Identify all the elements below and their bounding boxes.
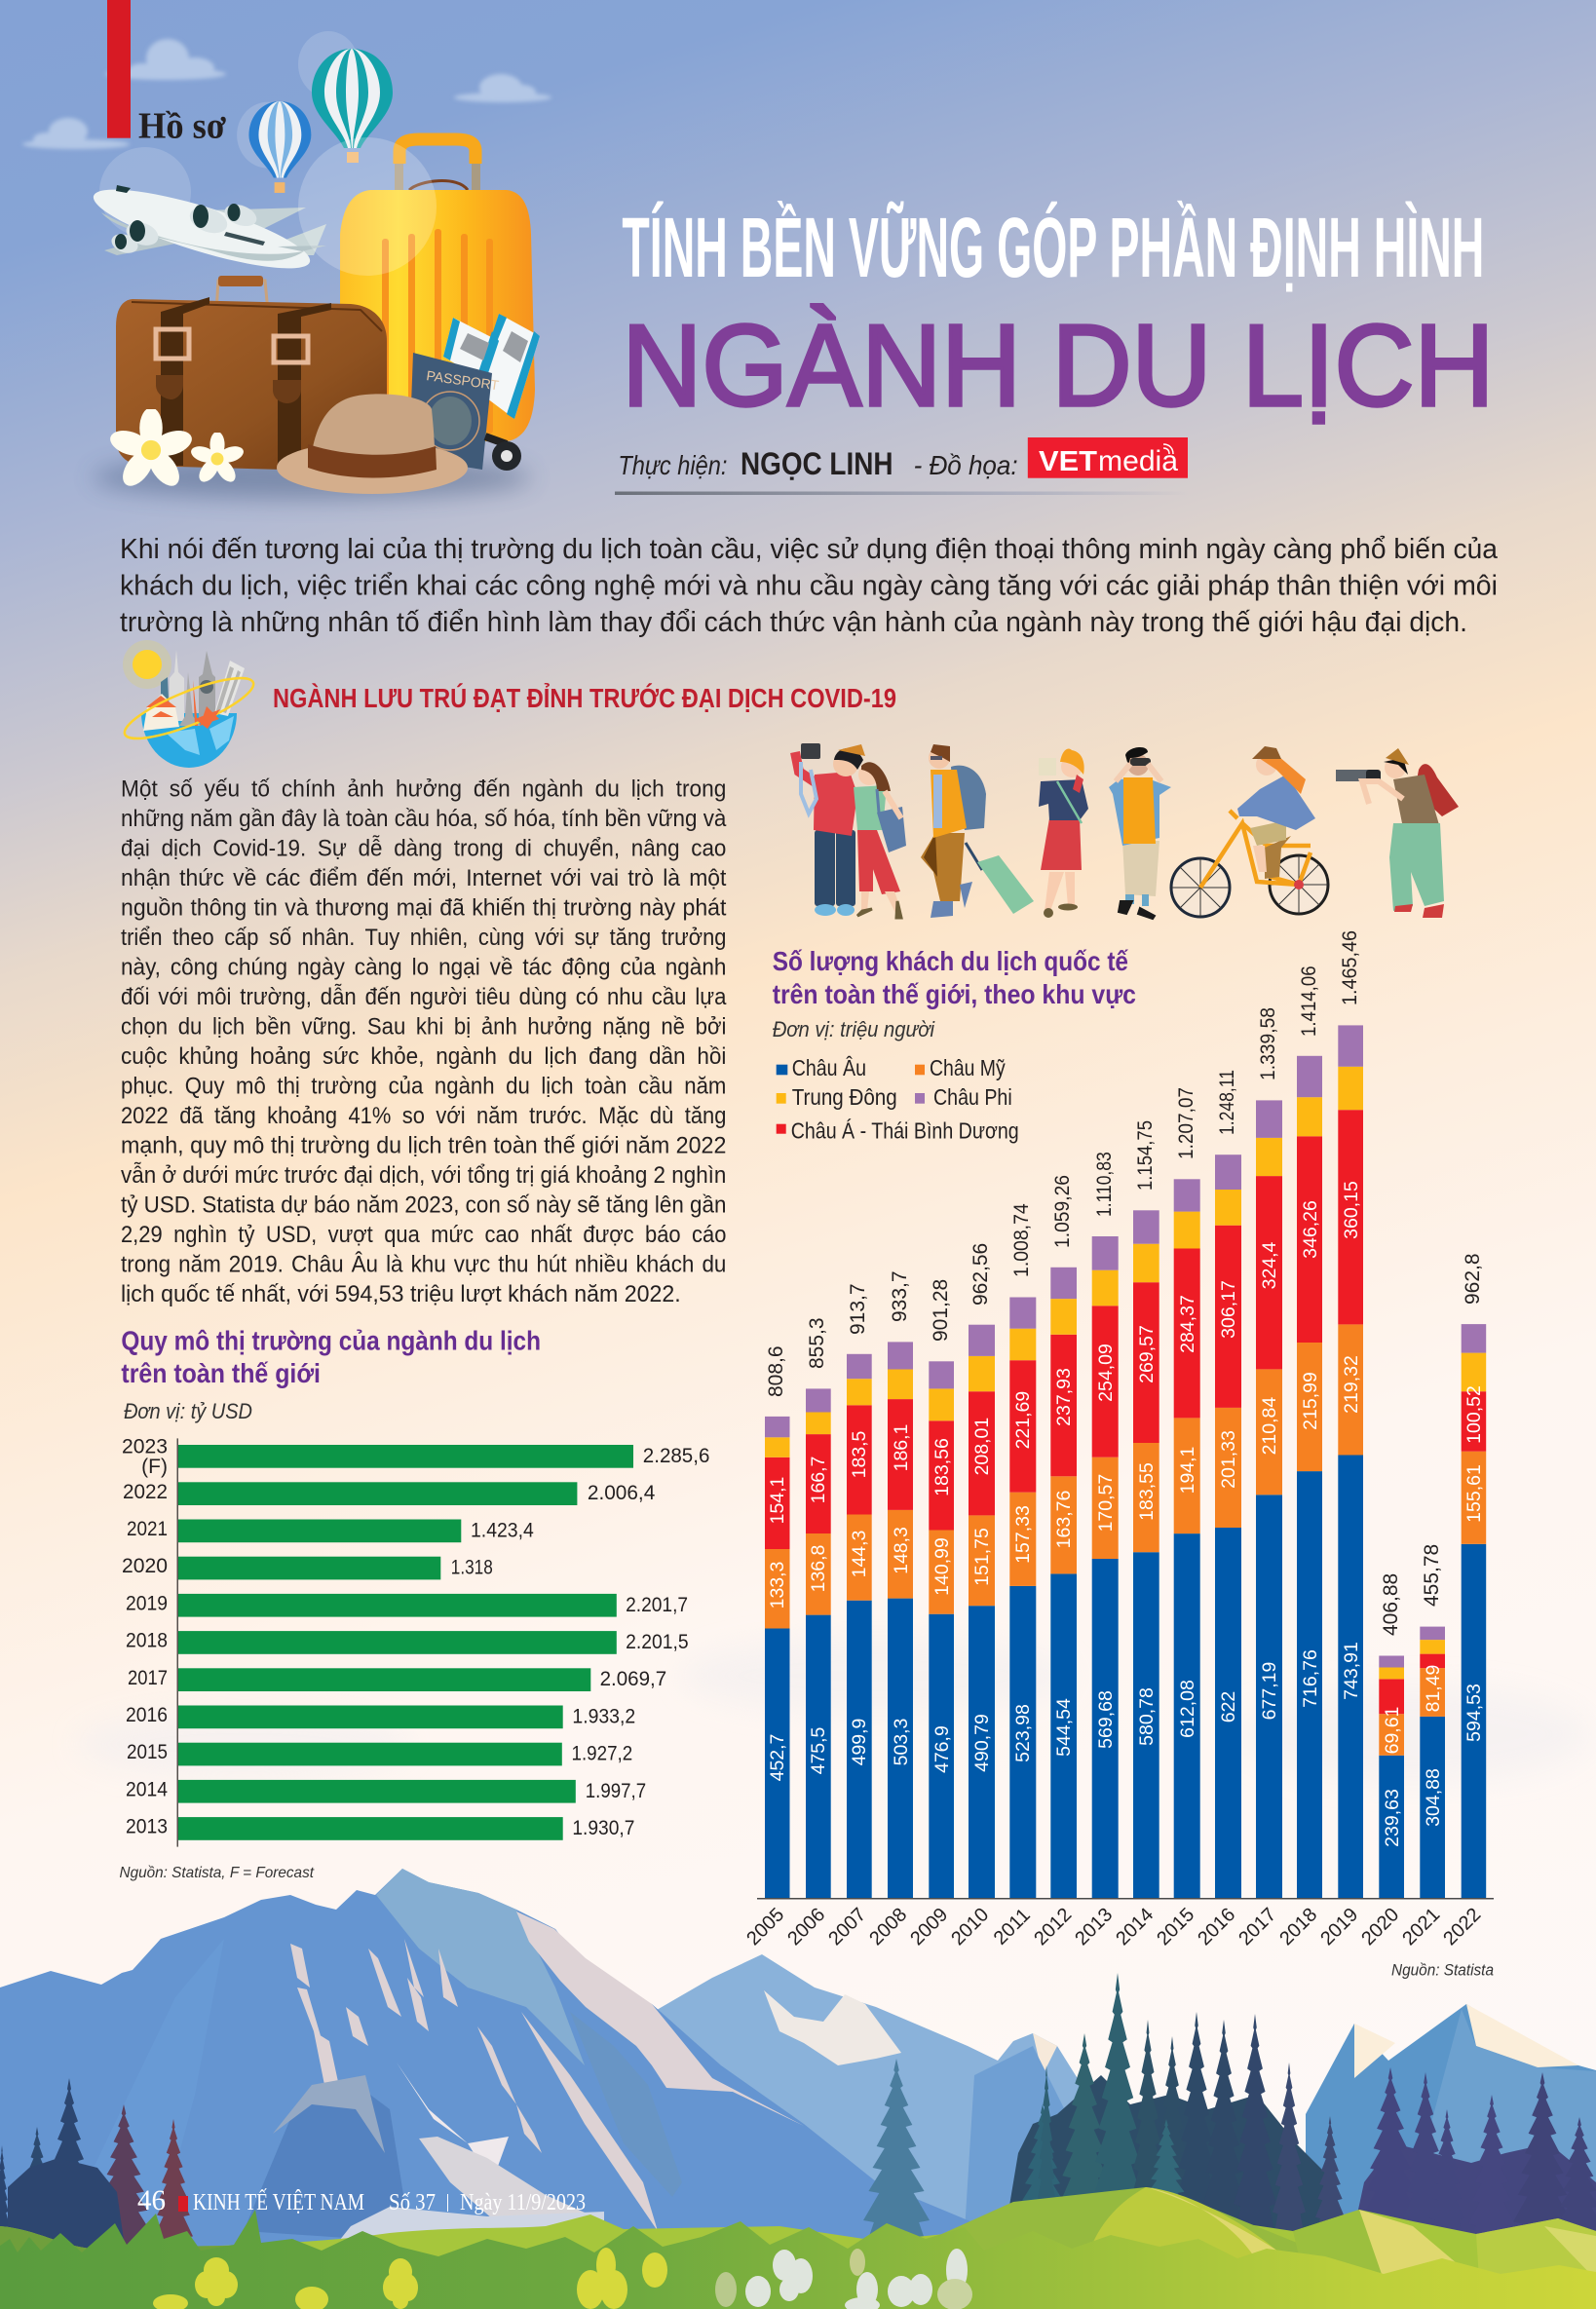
icon: globe with landmarks bbox=[119, 640, 259, 768]
icon: straw hat bbox=[277, 394, 468, 494]
value labels: 2.201,7 bbox=[626, 1594, 688, 1616]
bar: 2018: 716,76 bbox=[1300, 1649, 1321, 1708]
value labels: 1.423,4 bbox=[471, 1519, 534, 1541]
intro paragraph: trường là những nhân tố điển hình làm thay đổi cách thức vận hành của ngành này trong thế giới hậu đại dịch. bbox=[120, 607, 1467, 638]
credits line: Thực hiện: bbox=[618, 450, 727, 480]
year labels: 2014 bbox=[126, 1778, 168, 1800]
bar: 2014: 1.154,75 bbox=[1134, 1120, 1157, 1191]
bar: 2020: 69,61 bbox=[1382, 1707, 1403, 1754]
figure: backpacker with suitcase bbox=[921, 744, 1034, 918]
chart: market size horizontal bar chart bbox=[119, 1325, 709, 1881]
bar: 2019: 743,91 bbox=[1341, 1642, 1362, 1700]
mountain: centre range bbox=[653, 1954, 1101, 2309]
bar: 2019 bbox=[1338, 930, 1363, 1898]
intro paragraph: Khi nói đến tương lai của thị trường du lịch toàn cầu, việc sử dụng điện thoại thông minh ngày càng phổ biến của bbox=[120, 534, 1499, 565]
bar: 2008: 503,3 bbox=[891, 1719, 912, 1765]
body text: nhận thức về các điểm đến mới, Internet với vai trò là một bbox=[121, 865, 727, 891]
bar: 2017: 210,84 bbox=[1259, 1397, 1280, 1455]
value labels: 1.933,2 bbox=[572, 1705, 635, 1727]
bar: 2018 bbox=[1297, 965, 1322, 1898]
bars bbox=[178, 1445, 633, 1840]
x-axis years: 2006 bbox=[783, 1904, 829, 1949]
year labels: 2013 bbox=[126, 1816, 168, 1838]
icon: large hot-air balloon bbox=[298, 31, 393, 163]
illustration: group of tourists bbox=[795, 743, 1459, 919]
bar: 2020 bbox=[1379, 1573, 1404, 1898]
body text: cuộc khủng hoảng sức khỏe, ngành du lịch đang dần hồi bbox=[121, 1043, 726, 1070]
icon: small hot-air balloon bbox=[237, 101, 311, 193]
icon: yellow hard-shell suitcase bbox=[298, 137, 535, 441]
body text: chọn du lịch bền vững. Sau khi bị ảnh hưởng nặng nề bởi bbox=[121, 1014, 726, 1041]
bar: 2011: 523,98 bbox=[1012, 1704, 1034, 1762]
unit note: Đơn vị: tỷ USD bbox=[124, 1399, 252, 1423]
logo: VETmedia: media bbox=[1098, 445, 1178, 477]
icon: clouds bbox=[22, 39, 551, 149]
bar: 2016: 622 bbox=[1218, 1691, 1239, 1722]
bar: 2008 bbox=[888, 1270, 913, 1898]
bar: 2016: 201,33 bbox=[1218, 1430, 1239, 1489]
bar: 2022: 962,8 bbox=[1462, 1253, 1484, 1305]
illustration: travel luggage, plane and balloons bbox=[22, 31, 551, 499]
source note: Nguồn: Statista, F = Forecast bbox=[119, 1865, 315, 1881]
intro paragraph: khách du lịch, việc triển khai các công nghệ mới và nhu cầu ngày càng tăng với các giải pháp thân thiện với môi bbox=[120, 571, 1498, 602]
bar: 2022: 100,52 bbox=[1463, 1385, 1485, 1444]
year labels: 2021 bbox=[127, 1518, 168, 1540]
bar: 2008: 148,3 bbox=[891, 1527, 912, 1574]
year labels: 2020 bbox=[122, 1555, 168, 1577]
bar: 2009: 901,28 bbox=[930, 1279, 952, 1342]
bar: 2012: 1.059,26 bbox=[1051, 1175, 1074, 1248]
bar: 2014 bbox=[1133, 1120, 1159, 1898]
bar: 2022: 155,61 bbox=[1463, 1464, 1485, 1523]
source note: Nguồn: Statista bbox=[1391, 1960, 1494, 1980]
figure: woman with map bbox=[1039, 748, 1088, 918]
value labels: 1.997,7 bbox=[586, 1780, 646, 1802]
meadow: flowers bbox=[153, 2248, 972, 2309]
bar: 2016: 1.248,11 bbox=[1216, 1070, 1238, 1135]
bar: 2018: 346,26 bbox=[1300, 1200, 1321, 1259]
bar: 2012: 163,76 bbox=[1053, 1491, 1075, 1548]
chart: international tourists stacked bar chart bbox=[742, 930, 1494, 1980]
bar: 2006: 855,3 bbox=[806, 1317, 828, 1369]
value labels: 1.318 bbox=[451, 1557, 493, 1579]
footer: page number and publication bbox=[137, 2184, 586, 2216]
bar: 2012: 544,54 bbox=[1053, 1698, 1075, 1757]
bar: 2013: 1.110,83 bbox=[1093, 1152, 1116, 1217]
year labels: (F) bbox=[141, 1456, 168, 1478]
year labels: 2022 bbox=[123, 1481, 168, 1503]
icon: brown leather suitcase bbox=[116, 276, 387, 472]
bar: 2010 bbox=[969, 1243, 995, 1898]
bar: 2007: 499,9 bbox=[849, 1719, 870, 1765]
body text: triển theo cấp số nhân. Tuy nhiên, cùng với sự tăng trưởng bbox=[121, 925, 726, 951]
bar: 2012: 237,93 bbox=[1053, 1368, 1075, 1426]
section tag: Hồ sơ: Hồ sơ bbox=[138, 105, 226, 146]
bar: 2009 bbox=[929, 1279, 954, 1898]
bar: 2015: 284,37 bbox=[1177, 1295, 1198, 1353]
x-axis years: 2011 bbox=[990, 1905, 1035, 1949]
body text: tỷ USD. Statista dự báo năm 2023, con số này sẽ tăng lên gần bbox=[121, 1192, 726, 1219]
bar: 2008: 933,7 bbox=[889, 1270, 911, 1322]
body text: vẫn ở dưới mức trước đại dịch, với tổng trị giá khoảng 2 nghìn bbox=[121, 1162, 726, 1189]
value labels: 1.927,2 bbox=[571, 1743, 632, 1765]
mountain: main peak bbox=[0, 1869, 977, 2309]
bar: 2010: 151,75 bbox=[971, 1528, 993, 1586]
logo: VETmedia bbox=[1028, 437, 1188, 478]
section heading: NGÀNH LƯU TRÚ ĐẠT ĐỈNH TRƯỚC ĐẠI DỊCH COVID-19 bbox=[273, 682, 896, 713]
legend: Châu Mỹ bbox=[930, 1055, 1006, 1080]
body text: đại dịch Covid-19. Sự dễ dàng trong di chuyển, nâng cao bbox=[121, 836, 726, 862]
legend: Châu Á - Thái Bình Dương bbox=[791, 1117, 1019, 1143]
title: NGÀNH DU LỊCH bbox=[622, 301, 1494, 431]
value labels: 2.285,6 bbox=[643, 1445, 709, 1467]
bar: 2022 bbox=[1462, 1253, 1486, 1898]
bar: 2017 bbox=[1256, 1007, 1282, 1898]
x-axis years: 2009 bbox=[906, 1904, 952, 1949]
bar: 2020: 406,88 bbox=[1380, 1573, 1402, 1636]
section tag: Hồ sơ bbox=[107, 0, 226, 146]
credits line: NGỌC LINH bbox=[741, 446, 893, 481]
icon: passport: PASSPORT bbox=[426, 367, 500, 393]
bar: 2015: 612,08 bbox=[1177, 1680, 1198, 1738]
bar: 2006: 136,8 bbox=[808, 1545, 829, 1592]
footer: page number and publication: KINH TẾ VIỆT NAM bbox=[193, 2189, 364, 2215]
bar: 2009: 140,99 bbox=[931, 1537, 953, 1596]
bar: 2017: 677,19 bbox=[1259, 1662, 1280, 1720]
year labels: 2016 bbox=[126, 1704, 168, 1726]
value labels bbox=[451, 1445, 709, 1839]
x-axis years: 2007 bbox=[824, 1904, 870, 1949]
bar: 2015 bbox=[1174, 1087, 1200, 1898]
x-axis years: 2014 bbox=[1112, 1904, 1158, 1949]
chart title: Quy mô thị trường của ngành du lịch bbox=[121, 1325, 541, 1356]
x-axis years: 2020 bbox=[1357, 1904, 1403, 1949]
chart title bbox=[773, 946, 1136, 1009]
x-axis years: 2018 bbox=[1275, 1904, 1321, 1949]
bar: 2010: 208,01 bbox=[971, 1418, 993, 1475]
x-axis years: 2005 bbox=[742, 1904, 788, 1949]
body text: phục. Quy mô thị trường của ngành du lịch toàn cầu năm bbox=[121, 1074, 726, 1100]
bar: 2010: 962,56 bbox=[969, 1243, 992, 1306]
legend: Trung Đông bbox=[792, 1084, 897, 1110]
value labels: 1.930,7 bbox=[572, 1817, 634, 1839]
icon: passport bbox=[409, 353, 500, 470]
legend: Châu Phi bbox=[933, 1084, 1012, 1110]
body text: những năm gần đây là toàn cầu hóa, số hóa, tính bền vững và bbox=[121, 806, 727, 832]
bar: 2009: 183,56 bbox=[931, 1438, 953, 1496]
body text: Một số yếu tố chính ảnh hưởng đến ngành du lịch trong bbox=[121, 776, 726, 803]
bar: 2016: 306,17 bbox=[1218, 1280, 1239, 1339]
credits line bbox=[615, 437, 1190, 495]
chart title: Số lượng khách du lịch quốc tế bbox=[773, 946, 1129, 976]
x-axis years: 2019 bbox=[1316, 1904, 1362, 1949]
figure: photographer with red backpack bbox=[1336, 748, 1459, 918]
legend bbox=[777, 1055, 1019, 1143]
legend: Châu Âu bbox=[792, 1055, 866, 1080]
bar: 2014: 580,78 bbox=[1136, 1687, 1158, 1746]
meadow: hills bbox=[0, 2187, 1596, 2309]
year labels: 2015 bbox=[127, 1741, 168, 1763]
bar: 2011: 157,33 bbox=[1012, 1505, 1034, 1564]
year labels: 2018 bbox=[126, 1630, 168, 1652]
bar: 2007 bbox=[847, 1283, 872, 1898]
year labels bbox=[122, 1436, 168, 1838]
shadow under luggage bbox=[93, 456, 531, 499]
x-axis years bbox=[742, 1904, 1485, 1949]
bar: 2012 bbox=[1050, 1175, 1077, 1898]
body text bbox=[121, 776, 727, 1307]
footer: page number and publication: Ngày 11/9/2023 bbox=[460, 2190, 586, 2215]
bar: 2017: 1.339,58 bbox=[1257, 1007, 1279, 1080]
chart title bbox=[121, 1325, 541, 1388]
icon: suitcase wheel bbox=[485, 436, 521, 471]
footer: page number and publication: Số 37 bbox=[389, 2190, 436, 2215]
bar: 2016 bbox=[1215, 1070, 1241, 1898]
body text: nguồn thông tin và thương mại đã khiến thị trường này phát bbox=[121, 895, 727, 922]
bar: 2013 bbox=[1092, 1152, 1119, 1898]
meadow: foreground grass bbox=[0, 2210, 1596, 2309]
bar: 2005: 452,7 bbox=[767, 1734, 788, 1781]
value labels: 2.006,4 bbox=[588, 1482, 656, 1504]
chart title: trên toàn thế giới bbox=[121, 1358, 321, 1388]
icon: boarding passes bbox=[443, 314, 540, 419]
body text: 2,29 nghìn tỷ USD, vượt qua mức cao nhất được báo cáo bbox=[121, 1222, 726, 1248]
bar: 2019: 1.465,46 bbox=[1339, 930, 1361, 1005]
trees: dark right forest bbox=[1004, 1973, 1596, 2252]
footer: page number and publication: 46 bbox=[137, 2184, 166, 2216]
bar: 2018: 1.414,06 bbox=[1298, 965, 1320, 1037]
bar: 2020: 239,63 bbox=[1382, 1789, 1403, 1847]
body text: này, công chúng ngày càng lo ngại về tác động của ngành bbox=[121, 955, 726, 981]
bar: 2019: 219,32 bbox=[1341, 1355, 1362, 1414]
bar: 2011 bbox=[1009, 1203, 1036, 1898]
tree: lone blue spruce bbox=[863, 2059, 930, 2253]
x-axis years: 2015 bbox=[1153, 1904, 1198, 1949]
bar: 2018: 215,99 bbox=[1300, 1372, 1321, 1430]
year labels: 2017 bbox=[128, 1667, 168, 1689]
bar: 2011: 1.008,74 bbox=[1010, 1203, 1033, 1277]
bar: 2013: 170,57 bbox=[1095, 1474, 1117, 1532]
x-axis years: 2017 bbox=[1235, 1904, 1280, 1949]
year labels: 2023 bbox=[122, 1436, 168, 1457]
bar: 2014: 183,55 bbox=[1136, 1462, 1158, 1521]
figure: cyclist on orange bicycle bbox=[1171, 746, 1328, 917]
value labels: 2.201,5 bbox=[626, 1631, 689, 1653]
bar: 2019: 360,15 bbox=[1341, 1181, 1362, 1239]
body text: 2022 đã tăng khoảng 41% so với năm trước. Mặc dù tăng bbox=[121, 1103, 726, 1129]
trees: left group bbox=[0, 2078, 193, 2260]
body text: đối với môi trường, dẫn đến người tiêu dùng có nhu cầu lựa bbox=[121, 984, 727, 1010]
title bbox=[622, 201, 1494, 431]
bar: 2006: 166,7 bbox=[808, 1457, 829, 1503]
intro paragraph bbox=[120, 534, 1499, 638]
bar: 2014: 269,57 bbox=[1136, 1325, 1158, 1383]
x-axis years: 2021 bbox=[1398, 1904, 1444, 1949]
bar: 2007: 913,7 bbox=[847, 1283, 869, 1335]
bar: 2015: 194,1 bbox=[1177, 1447, 1198, 1494]
figure: man with binoculars bbox=[1109, 747, 1171, 919]
x-axis years: 2008 bbox=[865, 1904, 911, 1949]
x-axis years: 2013 bbox=[1071, 1904, 1117, 1949]
value labels: 2.069,7 bbox=[600, 1668, 666, 1690]
chart title: trên toàn thế giới, theo khu vực bbox=[773, 979, 1136, 1009]
bar: 2007: 183,5 bbox=[849, 1430, 870, 1478]
body text: lịch quốc tế nhất, với 594,53 triệu lượt khách năm 2022. bbox=[121, 1281, 681, 1307]
bar: 2005: 133,3 bbox=[767, 1562, 788, 1609]
x-axis years: 2012 bbox=[1030, 1904, 1076, 1949]
bar: 2005 bbox=[765, 1345, 789, 1898]
bar: 2008: 186,1 bbox=[891, 1424, 912, 1471]
x-axis years: 2016 bbox=[1194, 1904, 1239, 1949]
x-axis years: 2010 bbox=[947, 1904, 993, 1949]
stacked bars bbox=[765, 930, 1486, 1898]
bar: 2009: 476,9 bbox=[931, 1725, 953, 1773]
figure: selfie couple bbox=[795, 743, 906, 918]
body text: trong năm 2019. Châu Âu là khu vực thu hút nhiều khách du bbox=[121, 1252, 726, 1278]
bar: 2017: 324,4 bbox=[1259, 1241, 1280, 1289]
bar: 2021: 81,49 bbox=[1423, 1665, 1444, 1712]
bar: 2021: 304,88 bbox=[1423, 1768, 1444, 1827]
bar: 2013: 254,09 bbox=[1095, 1344, 1117, 1402]
bar: 2010: 490,79 bbox=[971, 1714, 993, 1772]
bar: 2006: 475,5 bbox=[808, 1726, 829, 1774]
background landscape: mountains, trees and meadow bbox=[0, 1869, 1596, 2309]
faint clouds behind charts bbox=[78, 1637, 1588, 1783]
x-axis years: 2022 bbox=[1439, 1904, 1485, 1949]
bar: 2021 bbox=[1420, 1544, 1445, 1898]
bar: 2006 bbox=[806, 1317, 831, 1898]
bar: 2005: 154,1 bbox=[767, 1477, 788, 1524]
bar: 2013: 569,68 bbox=[1095, 1690, 1117, 1749]
bar: 2022: 594,53 bbox=[1463, 1684, 1485, 1742]
icon: frangipani flowers bbox=[107, 407, 246, 491]
bar: 2011: 221,69 bbox=[1012, 1391, 1034, 1449]
icon: airplane bbox=[87, 147, 326, 284]
year labels: 2019 bbox=[126, 1592, 168, 1614]
unit note: Đơn vị: triệu người bbox=[773, 1017, 935, 1041]
body text: mạnh, quy mô thị trường du lịch trên toàn thế giới năm 2022 bbox=[121, 1133, 726, 1159]
bar: 2007: 144,3 bbox=[849, 1531, 870, 1577]
logo: VETmedia: VET bbox=[1039, 446, 1097, 477]
bar: 2015: 1.207,07 bbox=[1175, 1087, 1197, 1159]
credits line: - Đồ họa: bbox=[914, 450, 1018, 480]
bar: 2005: 808,6 bbox=[765, 1345, 787, 1397]
mountain: right range bbox=[1306, 2004, 1596, 2309]
bar: 2021: 455,78 bbox=[1421, 1544, 1443, 1607]
